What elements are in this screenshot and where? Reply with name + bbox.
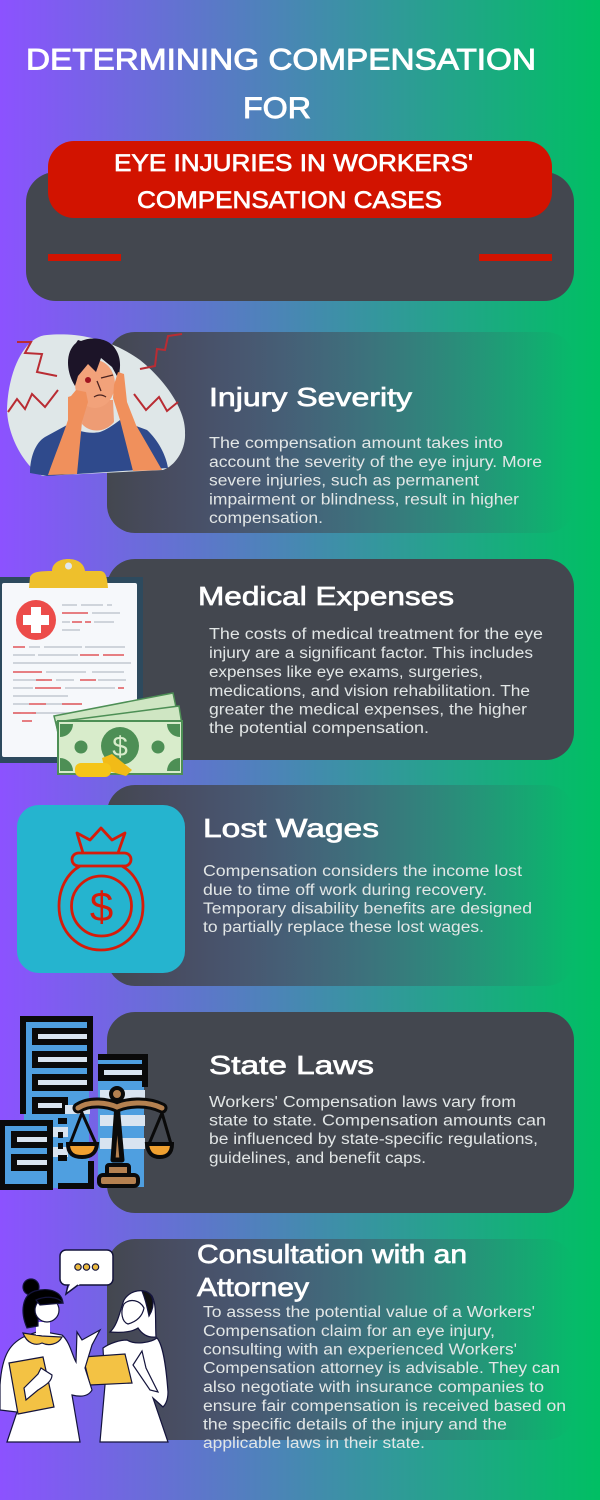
body text: injury are a significant factor. This includes <box>209 645 533 662</box>
card background <box>107 785 574 986</box>
body text <box>203 863 532 936</box>
dark header card <box>26 172 574 301</box>
body text: the potential compensation. <box>209 720 429 737</box>
main title <box>26 44 536 125</box>
heading: Medical Expenses <box>198 581 454 611</box>
panel: lost wages <box>17 785 574 986</box>
body text: be influenced by state-specific regulations, <box>209 1131 538 1148</box>
red subtitle banner: EYE INJURIES IN WORKERS' <box>114 150 473 177</box>
body text: greater the medical expenses, the higher <box>209 702 527 718</box>
body text: Compensation claim for an eye injury, <box>203 1323 495 1340</box>
panel: state laws <box>2 1012 574 1213</box>
body text: expenses like eye exams, surgeries, <box>209 664 483 681</box>
icon: buildings and scales of justice <box>2 1019 172 1188</box>
card background <box>107 332 574 533</box>
main title: FOR <box>243 92 311 125</box>
body text: severe injuries, such as permanent <box>209 472 480 490</box>
body text <box>203 1304 566 1452</box>
body text: impairment or blindness, result in higher <box>209 492 519 508</box>
body text: Compensation considers the income lost <box>203 863 523 880</box>
card background <box>107 1012 574 1213</box>
icon: two women talking <box>0 1250 168 1442</box>
heading: State Laws <box>209 1050 374 1080</box>
body text: account the severity of the eye injury. More <box>209 454 542 471</box>
body text <box>209 1094 546 1167</box>
body text: due to time off work during recovery. <box>203 882 487 899</box>
body text: compensation. <box>209 510 323 527</box>
body text: The compensation amount takes into <box>209 435 503 452</box>
body text: ensure fair compensation is received based on <box>203 1398 566 1415</box>
body text: also negotiate with insurance companies to <box>203 1379 544 1396</box>
body text: guidelines, and benefit caps. <box>209 1150 426 1167</box>
body text: To assess the potential value of a Workers' <box>203 1304 535 1321</box>
panel: medical expenses <box>0 559 574 777</box>
heading: Attorney <box>197 1272 309 1302</box>
red subtitle banner: COMPENSATION CASES <box>137 187 442 214</box>
body text: state to state. Compensation amounts can <box>209 1112 546 1130</box>
body text: Compensation attorney is advisable. They can <box>203 1360 560 1377</box>
card background <box>107 559 574 760</box>
body text: to partially replace these lost wages. <box>203 919 484 936</box>
panel: injury severity <box>7 332 574 533</box>
icon: money bag on teal tile <box>17 805 185 973</box>
red subtitle banner <box>48 141 552 218</box>
body text <box>209 626 543 737</box>
body text: medications, and vision rehabilitation. The <box>209 683 530 700</box>
heading: Consultation with an <box>197 1239 467 1269</box>
body text: The costs of medical treatment for the eye <box>209 626 543 643</box>
body text <box>209 435 542 527</box>
main title: DETERMINING COMPENSATION <box>26 44 536 76</box>
panel: consultation with an attorney <box>0 1239 574 1452</box>
body text: Temporary disability benefits are designed <box>203 900 532 918</box>
heading: Lost Wages <box>203 813 379 843</box>
body text: Workers' Compensation laws vary from <box>209 1094 516 1111</box>
body text: the specific details of the injury and the <box>203 1416 507 1434</box>
icon: money bag on teal tile: $ <box>90 883 113 930</box>
icon: clipboard with medical bill and cash <box>0 559 182 777</box>
icon: clipboard with medical bill and cash: $ <box>112 731 128 762</box>
heading: Injury Severity <box>209 382 412 412</box>
body text: applicable laws in their state. <box>203 1435 425 1452</box>
card background <box>107 1239 574 1440</box>
header panel <box>26 44 574 301</box>
heading <box>197 1239 467 1302</box>
icon: man holding injured eye <box>7 334 185 476</box>
body text: consulting with an experienced Workers' <box>203 1342 517 1358</box>
